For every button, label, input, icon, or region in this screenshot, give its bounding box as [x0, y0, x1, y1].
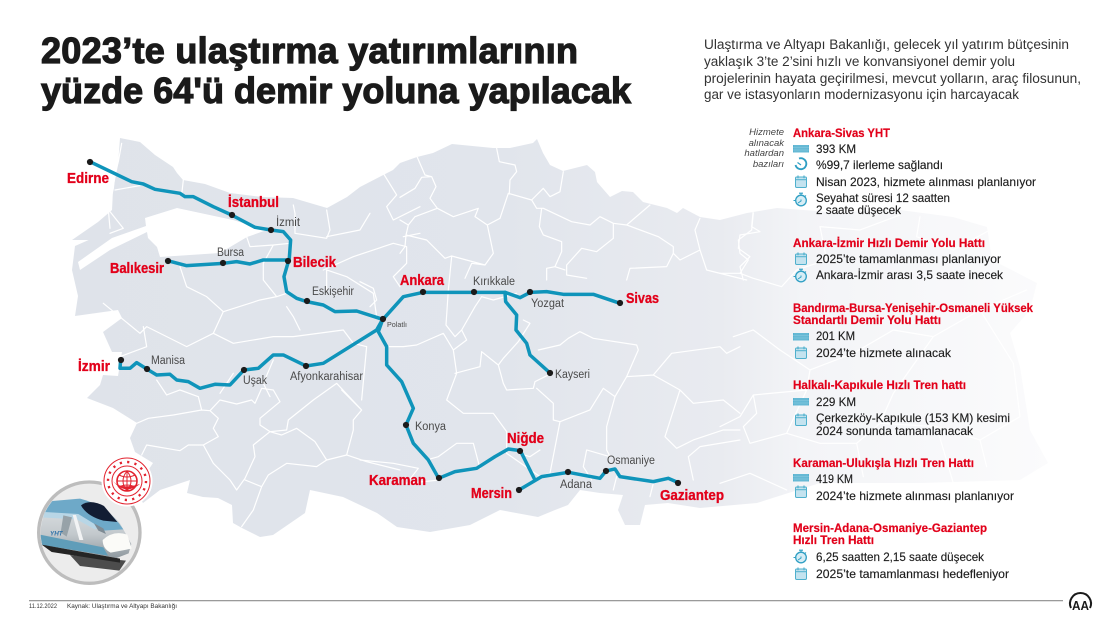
panel: Karaman-Ulukışla: 2024’te hizmete alınması planlanıyor — [816, 489, 1014, 503]
panel: Karaman-Ulukışla: 419 KM — [816, 472, 853, 486]
panel: Ankara-Sivas YHT: 393 KM — [816, 142, 856, 156]
city labels: Bursa — [217, 247, 245, 259]
footer — [29, 601, 1063, 610]
city labels: Mersin — [471, 486, 512, 502]
panel: Karaman-Ulukışla — [793, 456, 1014, 503]
line: Edirne to Polatlı, Balıkesir branch and İzmir branch — [90, 162, 383, 388]
side note: hatlardan — [744, 148, 784, 159]
panel: Karaman-Ulukışla: Karaman-Ulukışla Hızlı Tren Hattı — [793, 456, 974, 470]
panel: Ankara-İzmir — [793, 235, 1004, 282]
panel: Ankara-Sivas YHT: Ankara-Sivas YHT — [793, 126, 891, 140]
panel: Ankara-Sivas YHT: 2 saate düşecek — [816, 203, 902, 217]
province borders north — [400, 148, 760, 280]
panel: Mersin-Gaziantep — [793, 521, 1009, 581]
city labels: Polatlı — [387, 320, 407, 329]
panel: Mersin-Gaziantep: Hızlı Tren Hattı — [793, 533, 874, 547]
city labels — [67, 171, 724, 504]
AA logo: AA — [1072, 598, 1090, 613]
panel: Halkalı-Kapıkule — [793, 378, 1010, 438]
panel: Bandırma-Bursa: 2024’te hizmete alınacak — [816, 346, 952, 360]
city labels: Niğde — [507, 431, 544, 447]
intro text: projelerinin hayata geçirilmesi, mevcut yolların, araç filosunun, — [704, 71, 1081, 86]
city labels: Manisa — [151, 355, 186, 367]
panel: Ankara-Sivas YHT: Nisan 2023, hizmete alınması planlanıyor — [816, 175, 1036, 189]
panel: Halkalı-Kapıkule: Halkalı-Kapıkule Hızlı Tren hattı — [793, 378, 966, 392]
city labels: Afyonkarahisar — [290, 371, 363, 383]
city labels: Osmaniye — [607, 455, 655, 467]
side note — [744, 127, 785, 170]
city labels: Uşak — [243, 375, 267, 387]
intro text: gar ve istasyonların modernizasyonu için harcayacak — [704, 87, 1019, 102]
panel: Bandırma-Bursa: Standartlı Demir Yolu Hattı — [793, 313, 941, 327]
panel: Mersin-Gaziantep: Mersin-Adana-Osmaniye-Gaziantep — [793, 521, 987, 535]
province borders east — [720, 213, 1027, 490]
panel: Mersin-Gaziantep: 2025’te tamamlanması hedefleniyor — [816, 567, 1009, 581]
panel: Bandırma-Bursa: Bandırma-Bursa-Yenişehir-Osmaneli Yüksek — [793, 301, 1033, 315]
panel: Ankara-İzmir: Ankara-İzmir arası 3,5 saate inecek — [816, 268, 1004, 282]
title: yüzde 64'ü demir yoluna yapılacak — [41, 70, 632, 111]
panel: Ankara-Sivas YHT: %99,7 ilerleme sağlandı — [816, 158, 943, 172]
train photo — [39, 482, 140, 583]
icon: progress — [796, 158, 806, 169]
panel: Halkalı-Kapıkule: 2024 sonunda tamamlanacak — [816, 424, 974, 438]
city labels: İzmit — [276, 216, 301, 229]
panel: Ankara-İzmir: 2025’te tamamlanması planlanıyor — [816, 252, 1001, 266]
city labels: Bilecik — [293, 255, 337, 271]
city labels: Yozgat — [531, 298, 565, 310]
city labels: Sivas — [626, 291, 659, 307]
panel: Mersin-Gaziantep: 6,25 saatten 2,15 saate düşecek — [816, 550, 985, 564]
city labels: Gaziantep — [660, 488, 724, 504]
city labels: İzmir — [78, 358, 110, 375]
province borders centre and south — [360, 257, 740, 497]
panel: Halkalı-Kapıkule: Çerkezköy-Kapıkule (153 KM) kesimi — [816, 411, 1010, 425]
panel: Bandırma-Bursa: 201 KM — [816, 329, 855, 343]
city labels: Balıkesir — [110, 261, 164, 277]
railway network — [87, 159, 681, 493]
city labels: Adana — [560, 479, 593, 491]
train photo: YHT — [50, 531, 64, 538]
side note: Hizmete — [749, 127, 784, 138]
intro text: Ulaştırma ve Altyapı Bakanlığı, gelecek yıl yatırım bütçesinin — [704, 37, 1069, 52]
city labels: Eskişehir — [312, 286, 354, 298]
city labels: Karaman — [369, 473, 426, 489]
map of Turkey — [72, 138, 1048, 537]
panel: Ankara-İzmir: Ankara-İzmir Hızlı Demir Yolu Hattı — [793, 235, 985, 250]
city labels: Kayseri — [555, 369, 590, 381]
side note: alınacak — [749, 138, 785, 149]
city labels: Kırıkkale — [473, 276, 515, 288]
Sea of Marmara — [78, 208, 267, 270]
city labels: Ankara — [400, 273, 445, 289]
footer: 11.12.2022 — [29, 603, 57, 610]
station dots — [87, 159, 681, 493]
province borders west — [103, 143, 420, 400]
panel: Ankara-Sivas YHT — [793, 126, 1036, 217]
footer: Kaynak: Ulaştırma ve Altyapı Bakanlığı — [67, 603, 177, 610]
city labels: Konya — [415, 421, 447, 433]
intro text — [704, 37, 1081, 102]
country shape — [72, 138, 1048, 537]
side note: bazıları — [753, 159, 784, 170]
AA logo — [1070, 593, 1091, 613]
province borders south west — [137, 380, 400, 527]
ministry seal — [102, 456, 152, 506]
title: 2023’te ulaştırma yatırımlarının — [41, 30, 578, 71]
panel: Ankara-Sivas YHT: Seyahat süresi 12 saatten — [816, 191, 950, 205]
city labels: İstanbul — [228, 194, 279, 211]
line: Polatlı to Karaman, Niğde, Mersin, Gaziantep, Sivas and Kayseri — [378, 292, 678, 490]
city labels: Edirne — [67, 171, 109, 187]
intro text: yaklaşık 3’te 2’sini hızlı ve konvansiyonel demir yolu — [704, 54, 1015, 69]
panel: Bandırma-Bursa — [793, 301, 1033, 360]
panel: Halkalı-Kapıkule: 229 KM — [816, 395, 856, 409]
title — [41, 30, 632, 111]
